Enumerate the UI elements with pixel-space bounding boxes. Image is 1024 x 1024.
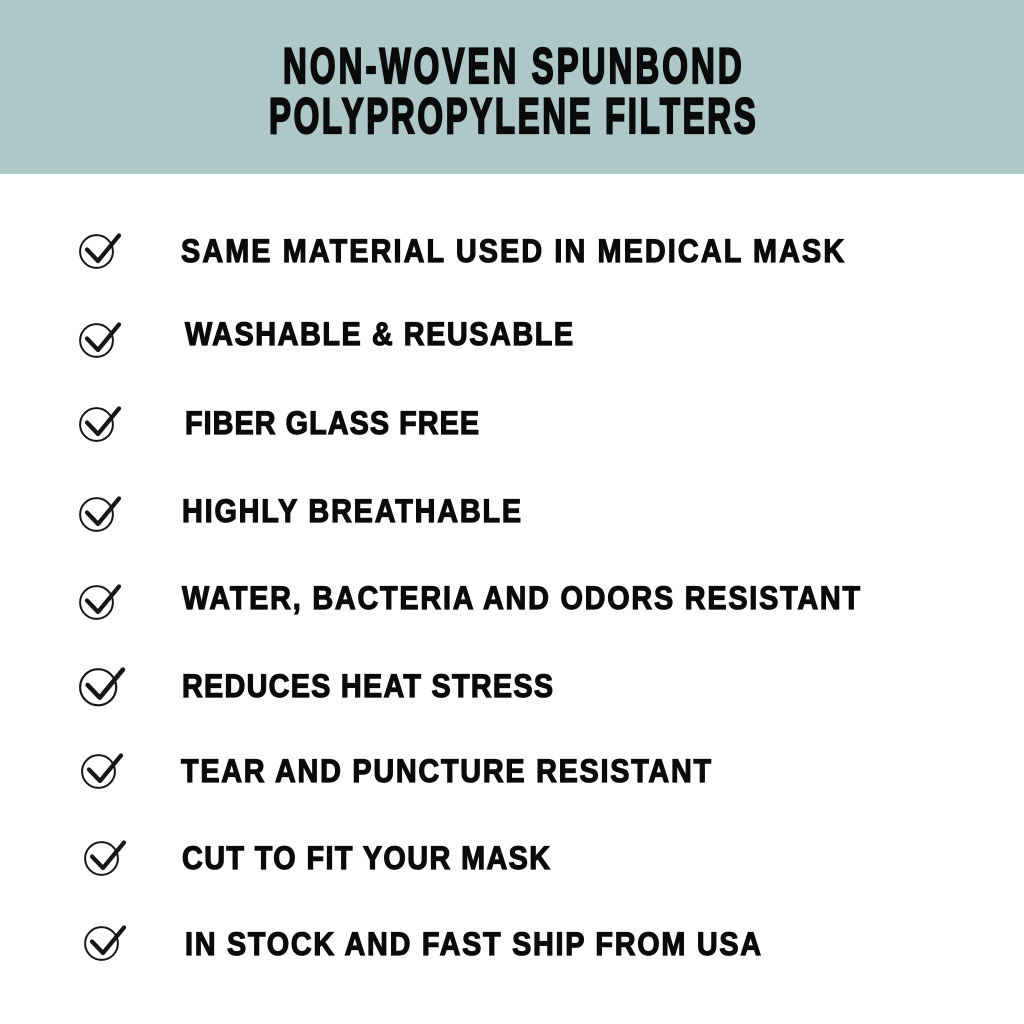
text: tear: TEAR AND PUNCTURE RESISTANT	[181, 754, 711, 789]
icon: check 8	[85, 842, 124, 875]
text: fiber glass: FIBER GLASS FREE	[185, 406, 479, 441]
icon: check 9	[85, 927, 124, 960]
icon: check 1	[80, 235, 119, 268]
title: POLYPROPYLENE FILTERS	[269, 88, 756, 144]
text: breathable: HIGHLY BREATHABLE	[182, 494, 521, 529]
icon: check 5	[80, 586, 119, 619]
icon: check 3	[80, 408, 119, 441]
text: in stock: IN STOCK AND FAST SHIP FROM USA	[185, 927, 761, 962]
header band	[0, 0, 1024, 174]
text: water: WATER, BACTERIA AND ODORS RESISTANT	[182, 581, 860, 616]
title	[269, 38, 756, 144]
icon: check 6	[80, 669, 123, 705]
icon: check 4	[80, 498, 119, 531]
text: cut to fit: CUT TO FIT YOUR MASK	[182, 841, 550, 876]
title: NON-WOVEN SPUNBOND	[283, 38, 742, 94]
text: washable: WASHABLE & REUSABLE	[185, 317, 573, 352]
icon: check 7	[82, 755, 121, 788]
text: heat stress: REDUCES HEAT STRESS	[182, 669, 553, 704]
icon: check 2	[80, 324, 119, 357]
text: same material: SAME MATERIAL USED IN MEDICAL MASK	[181, 234, 844, 269]
